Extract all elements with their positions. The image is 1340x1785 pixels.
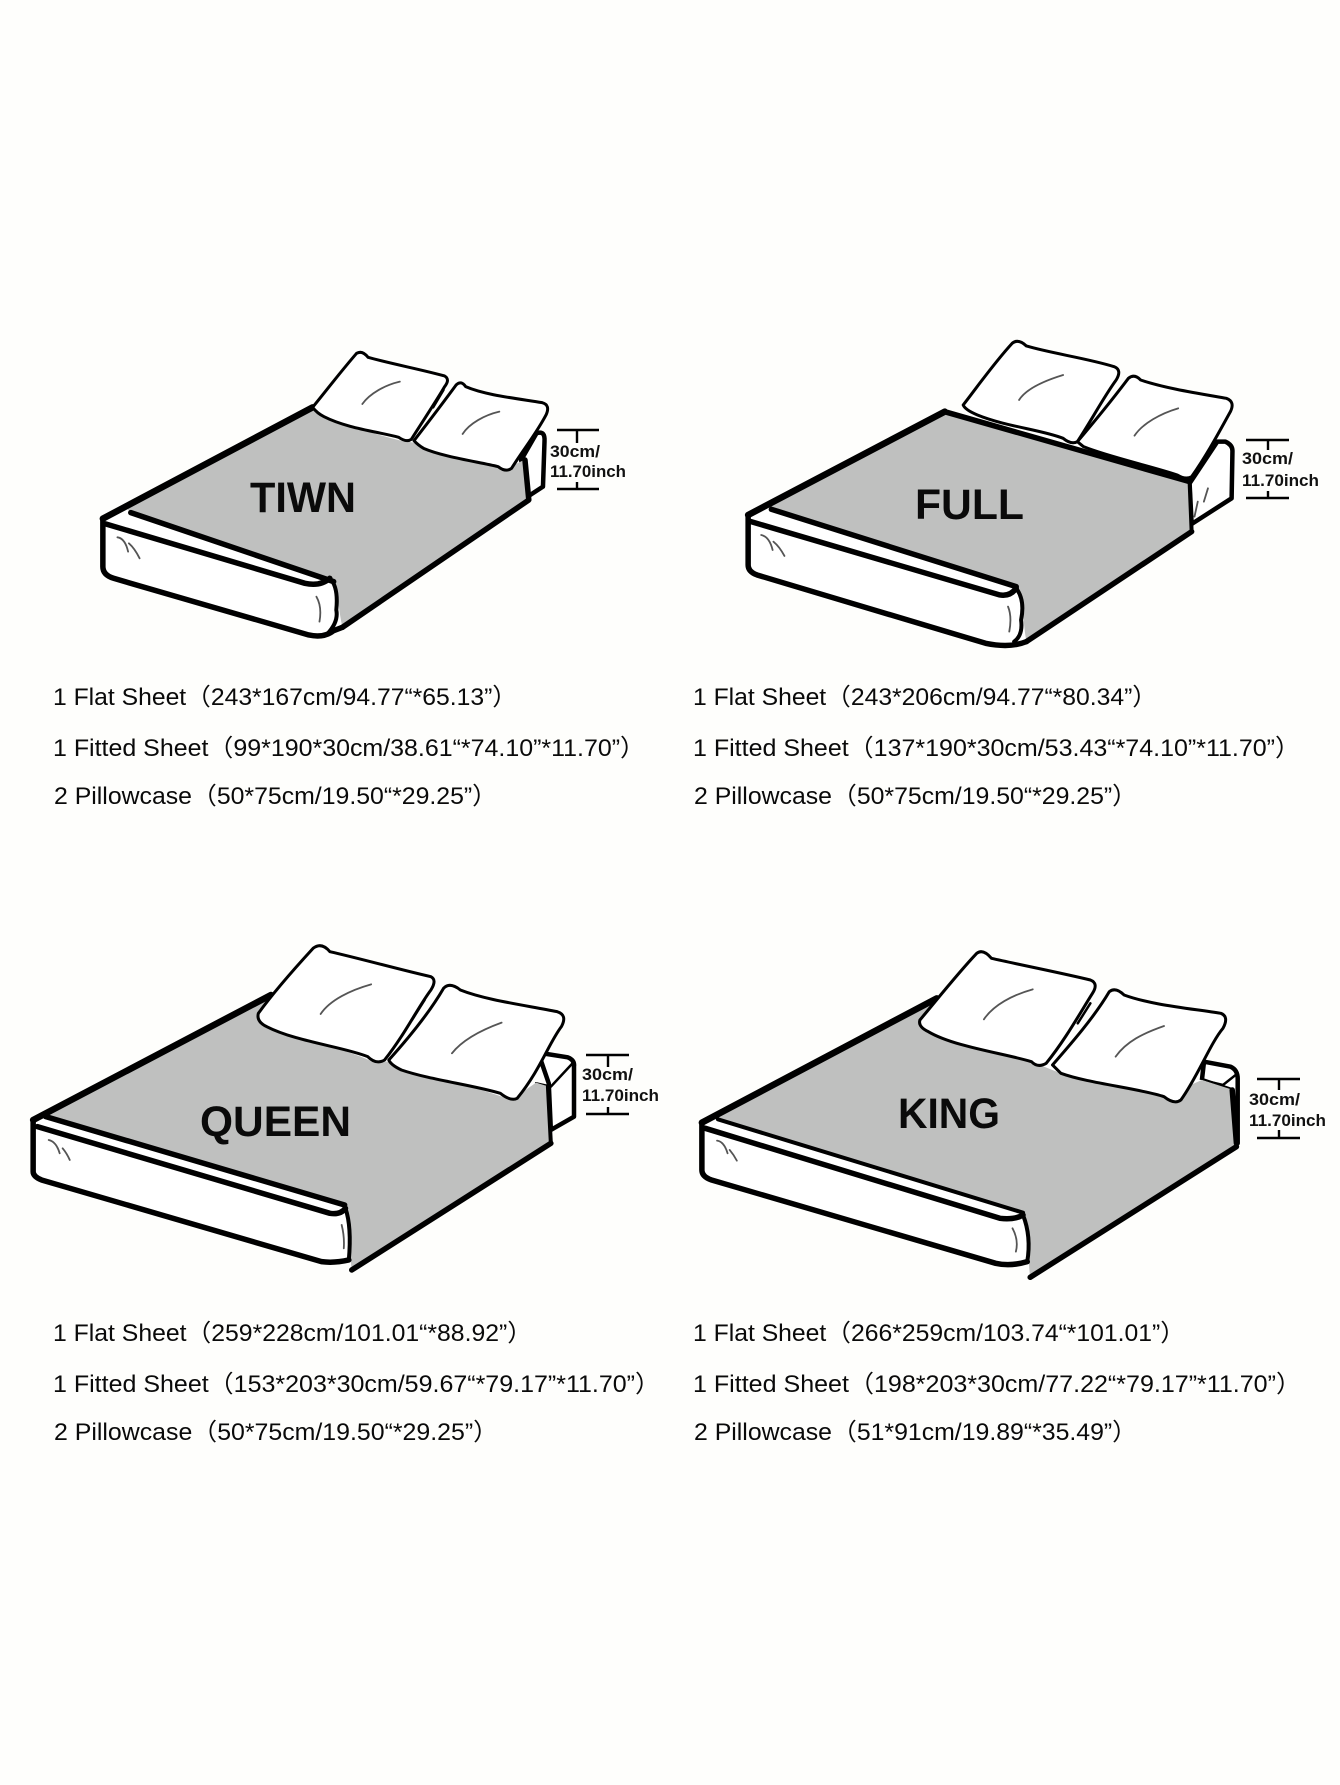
height marker: king — [1249, 1079, 1326, 1138]
size specification text: twin — [53, 684, 645, 810]
bed illustration: full — [748, 341, 1232, 645]
height marker: queen: 11.70inch — [582, 1086, 659, 1105]
size name: twin: TIWN — [250, 474, 356, 522]
height marker: full: 11.70inch — [1242, 471, 1319, 490]
size specification text: queen — [53, 1320, 660, 1446]
size specification text: king: 2 Pillowcase（51*91cm/19.89“*35.49”） — [694, 1419, 1137, 1446]
size specification text: queen: 1 Fitted Sheet（153*203*30cm/59.67“*79.17”*11.70”） — [53, 1371, 660, 1398]
size name: king: KING — [898, 1090, 1000, 1138]
height marker: twin: 30cm/ — [550, 442, 600, 461]
size specification text: full: 1 Fitted Sheet（137*190*30cm/53.43“*74.10”*11.70”） — [693, 735, 1300, 762]
size specification text: king: 1 Fitted Sheet（198*203*30cm/77.22“*79.17”*11.70”） — [693, 1371, 1301, 1398]
size specification text: queen: 1 Flat Sheet（259*228cm/101.01“*88.92”） — [53, 1320, 532, 1347]
height marker: king: 11.70inch — [1249, 1111, 1326, 1130]
height marker: queen — [582, 1055, 659, 1114]
pillow left — [963, 341, 1119, 443]
bed illustration: king — [702, 952, 1238, 1277]
pillow left — [920, 952, 1095, 1065]
size name: queen: QUEEN — [200, 1098, 351, 1146]
height marker: twin — [550, 430, 626, 489]
size name: full: FULL — [915, 481, 1024, 529]
pillow left — [258, 946, 434, 1062]
size specification text: full — [693, 684, 1300, 810]
size specification text: queen: 2 Pillowcase（50*75cm/19.50“*29.25”） — [54, 1419, 498, 1446]
size specification text: twin: 2 Pillowcase（50*75cm/19.50“*29.25”） — [54, 783, 497, 810]
pillow right — [389, 985, 564, 1099]
pillow right — [1077, 376, 1232, 478]
size specification text: king — [693, 1320, 1301, 1446]
panel: queen size — [33, 946, 660, 1446]
size specification text: full: 1 Flat Sheet（243*206cm/94.77“*80.34”） — [693, 684, 1157, 711]
height marker: twin: 11.70inch — [550, 462, 626, 481]
pillow right — [1052, 990, 1226, 1102]
panel: king size — [693, 952, 1326, 1446]
bed illustration: queen — [33, 946, 574, 1270]
size specification text: twin: 1 Flat Sheet（243*167cm/94.77“*65.13”） — [53, 684, 517, 711]
height marker: full — [1242, 440, 1319, 498]
height marker: full: 30cm/ — [1242, 449, 1293, 468]
size specification text: full: 2 Pillowcase（50*75cm/19.50“*29.25”） — [694, 783, 1137, 810]
panel: full size — [693, 341, 1319, 810]
height marker: king: 30cm/ — [1249, 1090, 1300, 1109]
size specification text: twin: 1 Fitted Sheet（99*190*30cm/38.61“*74.10”*11.70”） — [53, 735, 645, 762]
panel: twin size — [53, 352, 645, 810]
height marker: queen: 30cm/ — [582, 1065, 633, 1084]
pillow left — [313, 352, 447, 441]
size specification text: king: 1 Flat Sheet（266*259cm/103.74“*101.01”） — [693, 1320, 1185, 1347]
bed illustration: twin — [103, 352, 548, 636]
pillow right — [414, 383, 548, 470]
